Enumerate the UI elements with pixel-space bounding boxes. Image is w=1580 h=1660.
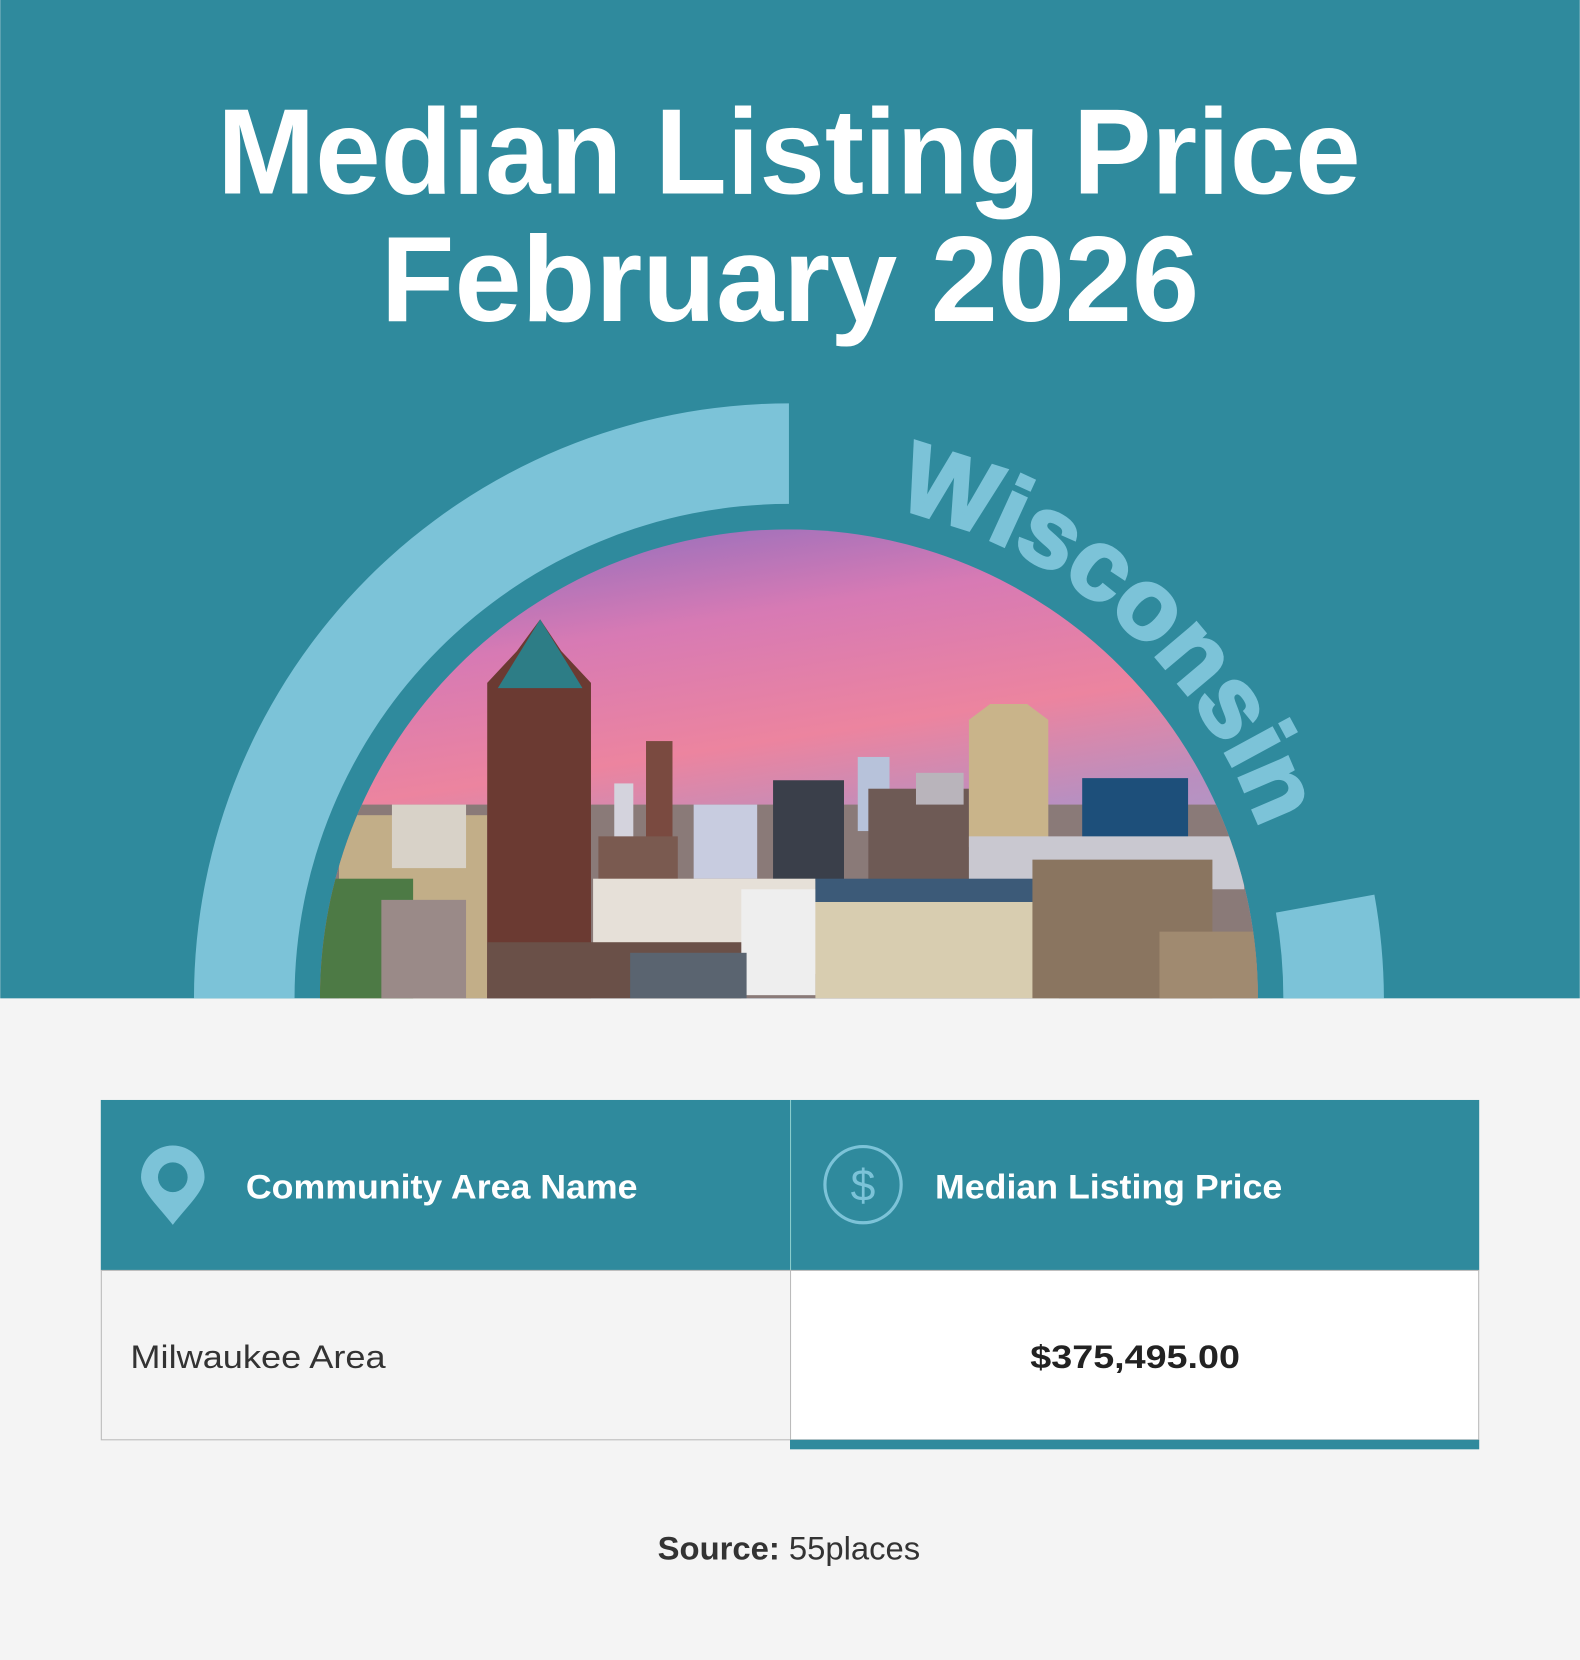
ring arc bbox=[194, 403, 1384, 998]
header: Median Listing Price: Median Listing Price bbox=[935, 1168, 1282, 1206]
table bbox=[101, 1100, 1479, 1449]
row: Milwaukee Area: Milwaukee Area bbox=[130, 1338, 386, 1375]
city photo bbox=[318, 524, 1260, 1006]
row: price: $375,495.00 bbox=[1030, 1338, 1240, 1375]
icon: location pin bbox=[141, 1145, 205, 1225]
row cells bbox=[101, 1270, 791, 1440]
title bbox=[217, 84, 1361, 347]
title: February 2026 bbox=[381, 211, 1199, 347]
icon: dollar coin bbox=[825, 1147, 901, 1223]
title: Median Listing Price bbox=[217, 84, 1361, 220]
source: Source: 55places bbox=[658, 1529, 920, 1566]
header: Community Area Name: Community Area Name bbox=[246, 1168, 638, 1206]
curved label: Wisconsin: Wisconsin bbox=[910, 439, 1304, 826]
table header bbox=[101, 1100, 1479, 1270]
icon: dollar coin: $ bbox=[851, 1162, 875, 1211]
header background bbox=[0, 0, 1580, 998]
